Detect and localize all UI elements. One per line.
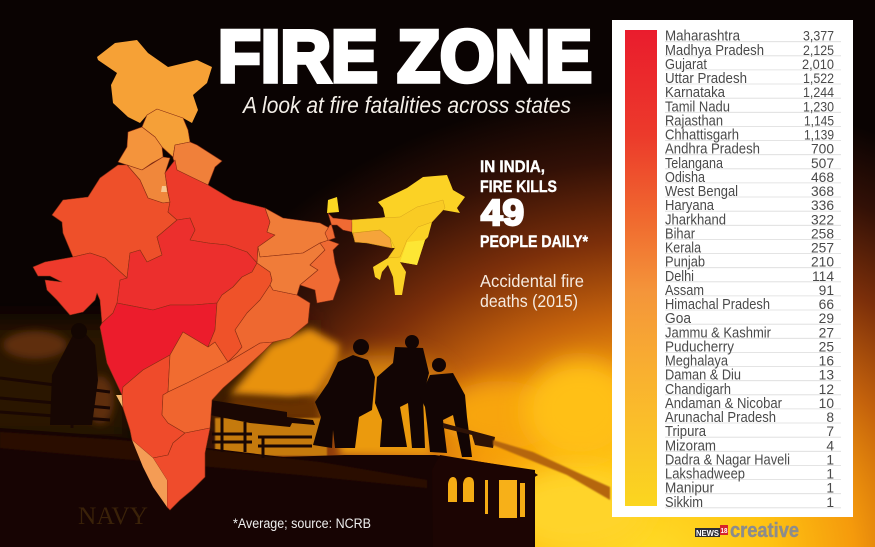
fatality numbers: 1 xyxy=(826,481,834,496)
fatality numbers: 29 xyxy=(819,311,834,326)
text: accidental fire deaths xyxy=(480,271,584,311)
subtitle: A look at fire fatalities across states xyxy=(241,92,571,118)
state names: Jammu & Kashmir xyxy=(665,325,771,341)
state names: Andhra Pradesh xyxy=(665,142,760,158)
state: Jharkhand xyxy=(257,243,325,295)
person on left xyxy=(50,333,98,425)
state names: Jharkhand xyxy=(665,212,726,228)
fatality numbers: 2,125 xyxy=(803,43,834,58)
state names: Telangana xyxy=(665,156,724,172)
state: Chhattisgarh xyxy=(208,263,272,362)
title: FIRE ZONE xyxy=(218,16,592,98)
callout: 49 people daily: 49 xyxy=(481,192,524,233)
state names: Dadra & Nagar Haveli xyxy=(665,452,790,468)
fatality numbers: 1,522 xyxy=(803,71,834,86)
state: Telangana xyxy=(168,332,228,392)
state names: Daman & Diu xyxy=(665,368,741,384)
fatality numbers: 257 xyxy=(811,240,834,256)
state names: Madhya Pradesh xyxy=(665,43,764,59)
fatality numbers: 1,145 xyxy=(804,113,834,128)
fatality numbers: 2,010 xyxy=(802,57,834,72)
state: Bihar xyxy=(258,208,335,257)
state: Gujarat xyxy=(33,253,127,323)
fatality numbers: 507 xyxy=(811,156,834,171)
fatality numbers: 12 xyxy=(819,382,834,397)
state names: Manipur xyxy=(665,481,714,497)
state names: Bihar xyxy=(665,226,695,242)
truck cab xyxy=(432,455,538,547)
state names: Andaman & Nicobar xyxy=(665,396,782,412)
state names: Sikkim xyxy=(665,495,703,511)
fatality numbers: 7 xyxy=(826,424,834,439)
state names: Rajasthan xyxy=(665,113,723,129)
fatality numbers: 468 xyxy=(811,170,834,185)
logo: News18 creative: creative xyxy=(730,520,799,542)
state names: Gujarat xyxy=(665,57,707,73)
fatality numbers: 10 xyxy=(819,396,834,411)
state: Andhra Pradesh xyxy=(162,342,273,433)
callout: 49 people daily: FIRE KILLS xyxy=(480,177,557,196)
fatality numbers: 91 xyxy=(819,283,834,298)
fatality numbers: 1 xyxy=(826,495,834,510)
state names: Himachal Pradesh xyxy=(665,297,770,313)
state names: Tripura xyxy=(665,424,707,440)
state: Haryana xyxy=(127,157,170,203)
fatality numbers: 700 xyxy=(811,142,834,157)
state names: Odisha xyxy=(665,170,706,186)
state names: Goa xyxy=(665,311,692,327)
state: Madhya Pradesh xyxy=(117,218,257,310)
state names: Delhi xyxy=(665,269,694,285)
state names: Assam xyxy=(665,283,704,299)
row separators xyxy=(665,42,841,508)
truck body silhouette xyxy=(0,428,535,547)
state names: Chandigarh xyxy=(665,382,731,398)
state names xyxy=(665,29,790,511)
fatality numbers: 1,244 xyxy=(803,85,834,100)
state: Jammu & Kashmir xyxy=(97,40,212,123)
state: Delhi xyxy=(161,186,167,192)
state names: Karnataka xyxy=(665,85,726,101)
fatality numbers: 16 xyxy=(819,354,834,368)
fatality numbers: 114 xyxy=(812,269,834,284)
fatality numbers: 322 xyxy=(811,212,834,227)
state names: Meghalaya xyxy=(665,354,729,370)
fatality numbers: 4 xyxy=(826,438,834,453)
state names: Arunachal Pradesh xyxy=(665,410,776,426)
state: Kerala xyxy=(132,440,167,507)
callout: 49 people daily xyxy=(480,157,588,251)
fatality numbers xyxy=(802,29,834,510)
fatality numbers: 13 xyxy=(819,368,834,383)
fatality numbers: 1 xyxy=(826,452,834,467)
state: Odisha xyxy=(228,285,310,362)
fatality numbers: 8 xyxy=(826,410,834,425)
state: Maharashtra xyxy=(100,303,217,395)
fatality numbers: 27 xyxy=(819,325,834,340)
fatality numbers: 25 xyxy=(819,339,834,354)
state names: Mizoram xyxy=(665,438,716,454)
state names: West Bengal xyxy=(665,184,738,200)
fatality numbers: 210 xyxy=(811,255,834,270)
map of India xyxy=(33,40,465,510)
text: accidental fire deaths: Accidental fire xyxy=(480,271,584,291)
water jet xyxy=(493,440,610,500)
callout: 49 people daily: PEOPLE DAILY* xyxy=(480,232,588,251)
truck lettering: NAVY: NAVY xyxy=(78,503,148,530)
state: West Bengal xyxy=(300,213,352,303)
state: Uttarakhand xyxy=(173,142,222,185)
state: Tamil Nadu xyxy=(153,428,210,510)
state names: Haryana xyxy=(665,198,715,214)
north-east states mass xyxy=(352,175,465,295)
state: Uttar Pradesh xyxy=(165,160,275,263)
logo: News18 creative: NEWS xyxy=(696,528,719,538)
fatality numbers: 1,230 xyxy=(803,99,834,114)
fence and gun on truck xyxy=(0,350,312,458)
state names: Punjab xyxy=(665,255,705,271)
callout: 49 people daily: IN INDIA, xyxy=(480,157,545,176)
fatality numbers: 368 xyxy=(811,184,834,199)
text: accidental fire deaths: deaths (2015) xyxy=(480,291,578,311)
state names: Maharashtra xyxy=(665,29,741,45)
colour scale bar xyxy=(625,30,657,506)
state: Goa xyxy=(116,395,123,408)
firefighters silhouettes xyxy=(313,335,472,457)
state names: Puducherry xyxy=(665,339,735,355)
fatality numbers: 66 xyxy=(819,297,834,312)
state: Assam xyxy=(352,200,445,258)
state names: Chhattisgarh xyxy=(665,128,739,144)
fatality numbers: 336 xyxy=(811,198,834,213)
fatality numbers: 1,139 xyxy=(804,128,834,142)
state: Meghalaya xyxy=(353,230,392,248)
state names: Lakshadweep xyxy=(665,466,745,482)
source note: *Average; source: NCRB xyxy=(233,516,371,531)
state: Punjab xyxy=(118,127,163,170)
state names: Uttar Pradesh xyxy=(665,71,747,87)
state: Karnataka xyxy=(122,355,185,458)
logo: News18 creative xyxy=(695,520,799,542)
logo: News18 creative: 18 xyxy=(720,528,728,535)
state: Rajasthan xyxy=(52,165,177,278)
state: Manipur xyxy=(400,240,425,265)
panel: state ranking list xyxy=(612,20,853,517)
state names: Kerala xyxy=(665,240,702,256)
fatality numbers: 1 xyxy=(826,466,834,482)
state names: Tamil Nadu xyxy=(665,99,730,115)
fatality numbers: 258 xyxy=(811,226,834,241)
state: Himachal Pradesh xyxy=(142,109,190,157)
fatality numbers: 3,377 xyxy=(803,29,834,44)
state: Sikkim xyxy=(327,197,339,213)
